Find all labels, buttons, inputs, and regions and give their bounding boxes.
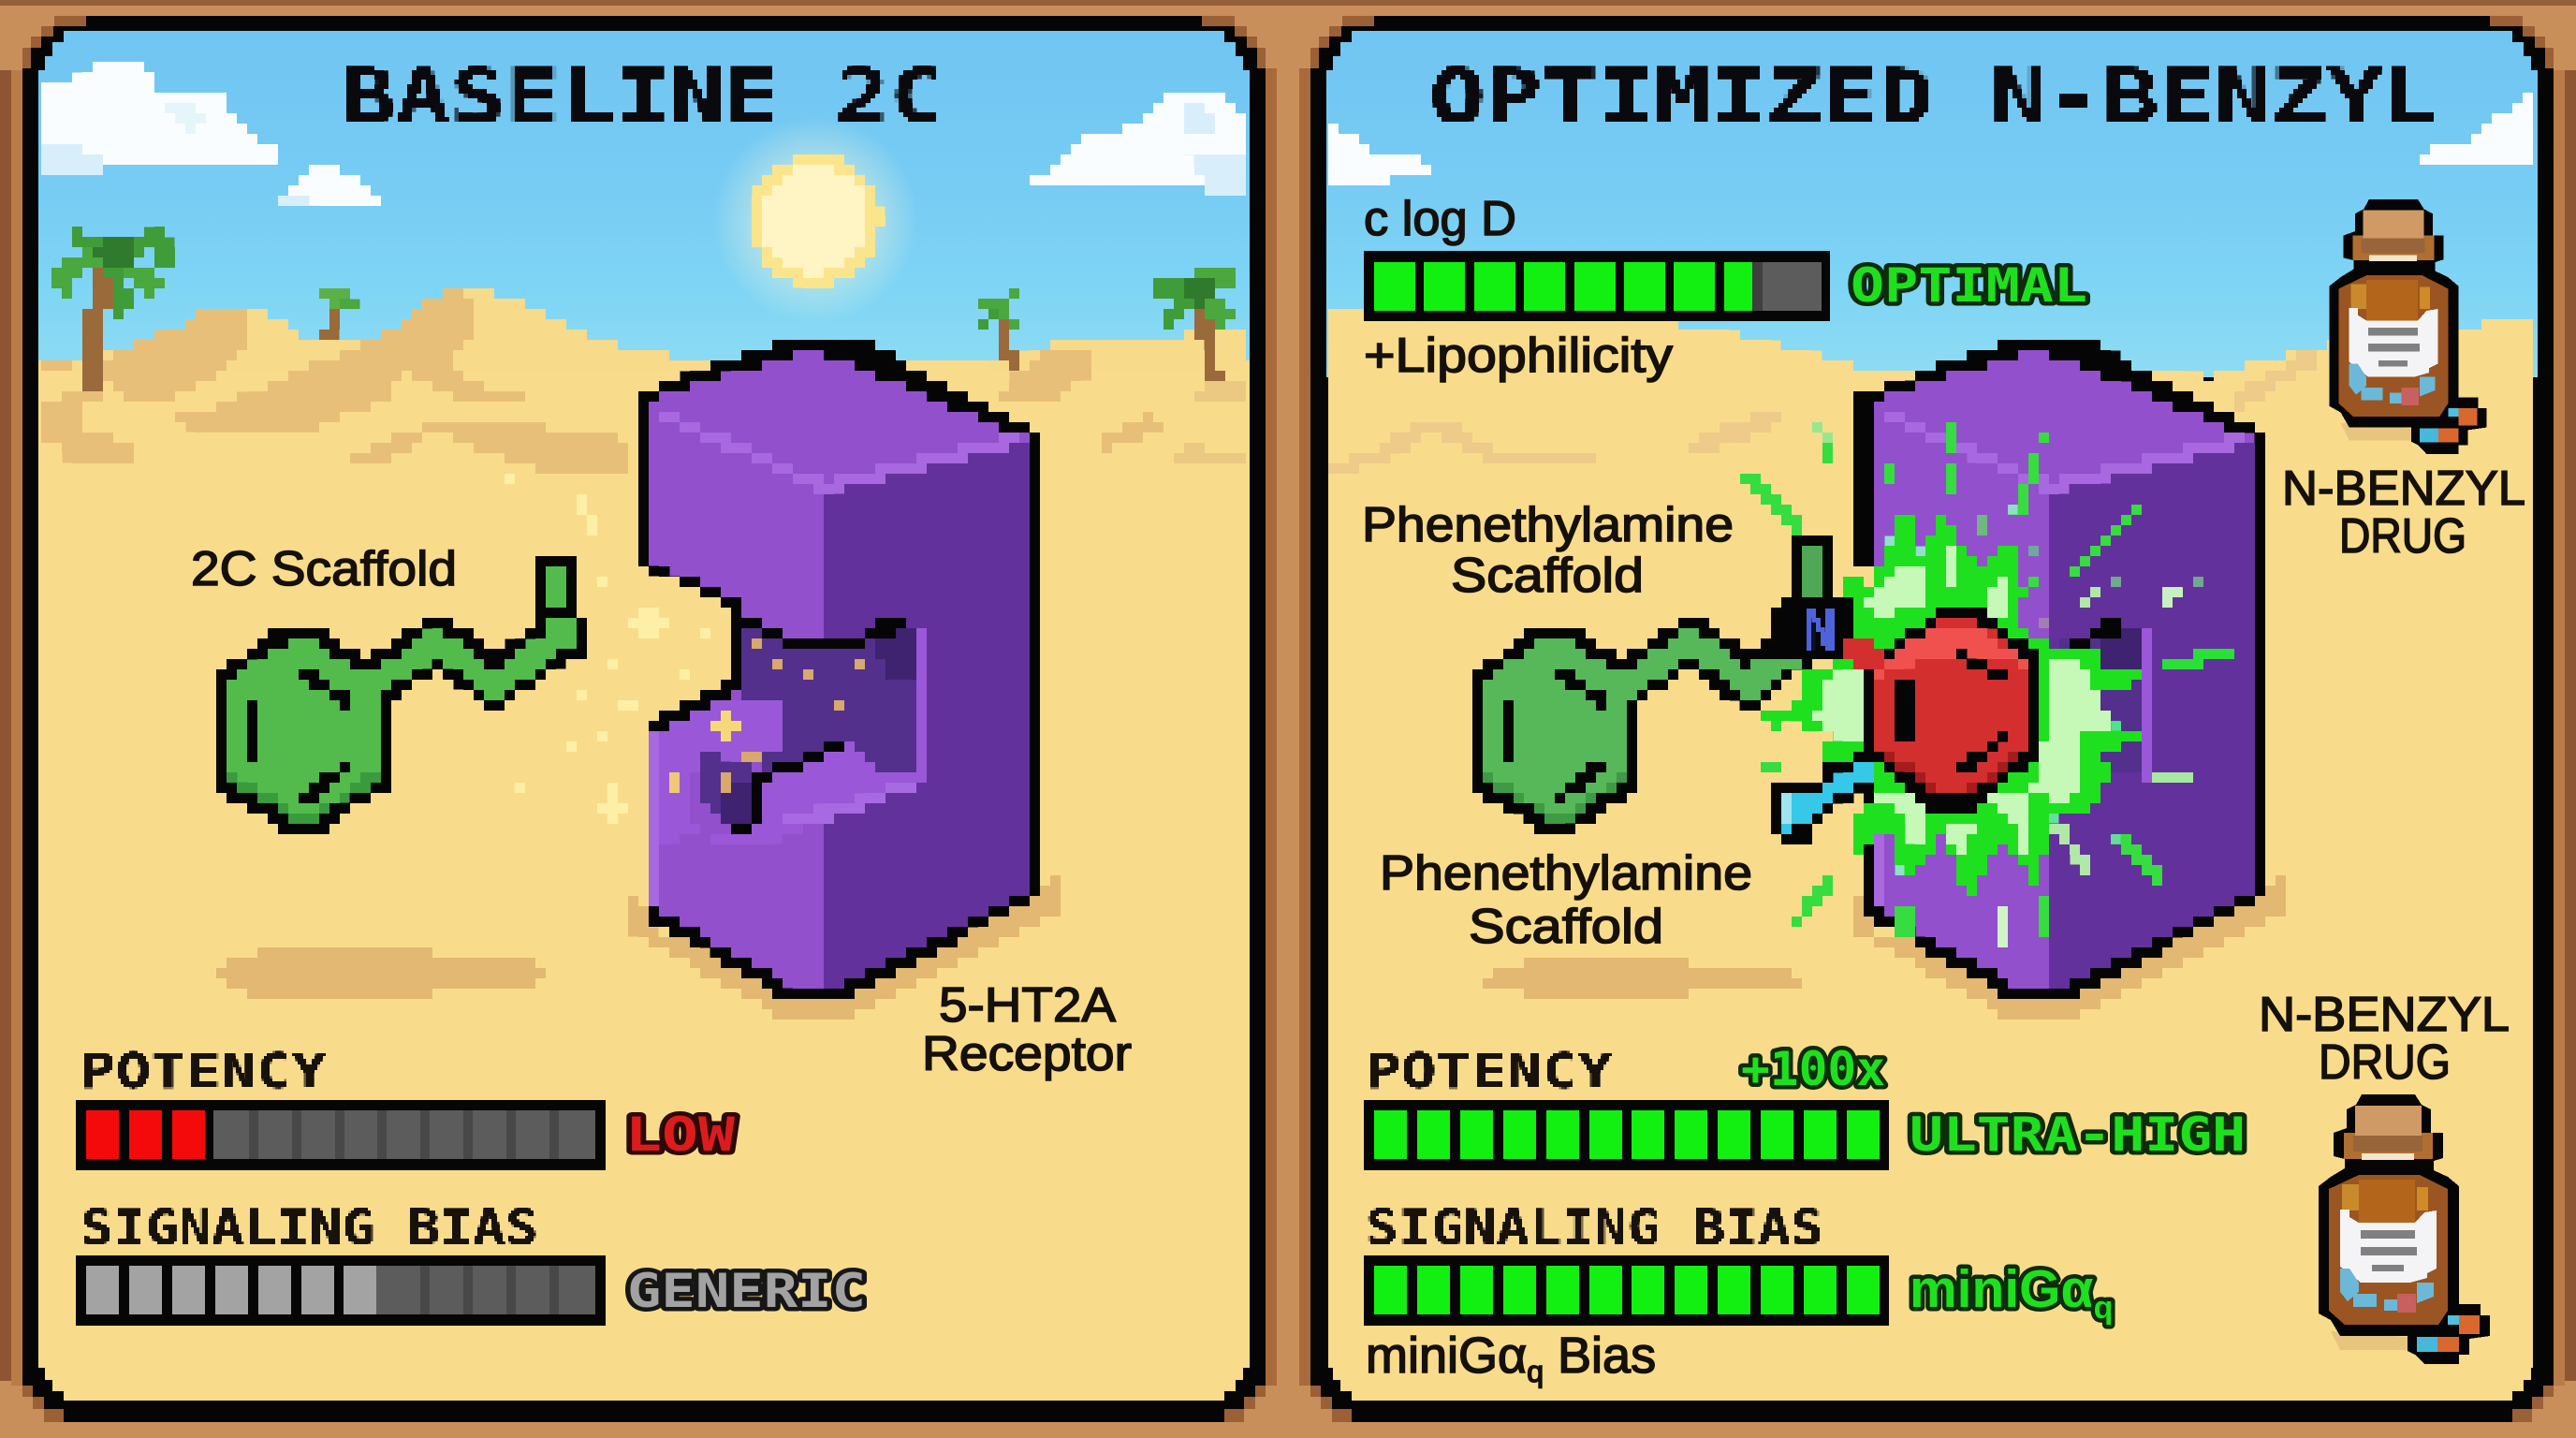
green energy rays [1744,425,2232,947]
stat: signaling bias left: GENERIC [627,1264,866,1318]
stat: potency left [76,1044,736,1170]
dunes [37,286,1251,477]
5-HT2A receptor [634,338,1042,1004]
palm trees [58,234,1232,389]
stat: signaling bias right: Bias [1544,1328,1656,1384]
sun [750,154,881,286]
particles [504,477,708,821]
label: N-benzyl drug upper: N-BENZYL [2282,462,2525,516]
label: 5-HT2A receptor [922,978,1132,1081]
title: baseline 2C: BASELINE 2C [341,53,944,140]
receptor cavity [655,609,924,847]
dunes [1326,348,2312,477]
label: phenethylamine scaffold lower: Phenethylamine [1380,846,1752,901]
specks [1975,433,2200,628]
receptor shadow [624,875,1062,1024]
stat: c log D: OPTIMAL [1851,258,2087,313]
stat: signaling bias right: q [2094,1290,2113,1326]
stat: signaling bias right: q [1527,1355,1544,1388]
panel: baseline 2C [22,16,1266,1422]
stat: potency left: LOW [625,1108,736,1162]
stat: potency right: POTENCY [1366,1044,1614,1100]
N atom label: N [1803,597,1837,663]
clouds [38,60,1251,209]
label: 5-HT2A receptor: 5-HT2A [939,978,1116,1033]
stat: signaling bias left [76,1200,866,1326]
label: N-benzyl drug lower: DRUG [2319,1035,2451,1090]
panel: optimized N-benzyl [1310,16,2554,1422]
desert background [1326,31,2539,1401]
benzyl ring [1846,606,2039,810]
label: N-benzyl drug upper [2282,462,2525,564]
stat: potency left: POTENCY [80,1044,328,1100]
desert background [37,31,1251,1401]
molecule: N stem [1760,533,1872,659]
stat: signaling bias left: SIGNALING BIAS [80,1200,538,1256]
label: phenethylamine scaffold upper [1362,498,1734,603]
stat: c log D: c log D [1364,192,1516,246]
stat: potency right: ULTRA-HIGH [1910,1108,2246,1162]
stat: c log D: +Lipophilicity [1364,329,1673,383]
cyan substituent [1772,756,1879,842]
icon: drug bottle lower [2319,1094,2490,1364]
label: 2C scaffold: 2C Scaffold [191,542,457,596]
molecule: 2C scaffold [215,552,591,831]
stat: potency right [1364,1042,2246,1170]
explosion burst [1760,512,2144,893]
label: phenethylamine scaffold upper: Scaffold [1451,549,1644,603]
label: N-benzyl drug upper: DRUG [2339,509,2466,564]
panel border [1310,16,2554,1422]
ground shadow [1481,961,1803,1004]
receptor shadow and body [1849,338,2287,1024]
sand [1326,307,2538,1401]
label: N-benzyl drug lower: N-BENZYL [2259,988,2510,1042]
label: phenethylamine scaffold lower [1380,846,1752,954]
title: optimized N-benzyl: OPTIMIZED N-BENZYL [1429,53,2439,140]
stat: potency right: +100x [1741,1042,1885,1096]
stat: c log D [1364,192,2087,383]
panel border [22,16,1266,1422]
stat: signaling bias right [1364,1200,2113,1388]
stat: signaling bias right: miniGα [1366,1328,1527,1384]
ground shadow [215,949,548,1004]
icon: drug bottle upper [2330,199,2487,454]
label: phenethylamine scaffold lower: Scaffold [1469,900,1663,954]
label: 5-HT2A receptor: Receptor [922,1027,1132,1081]
label: N-benzyl drug lower [2259,988,2510,1090]
stat: signaling bias right: SIGNALING BIAS [1366,1200,1823,1256]
molecule: phenethylamine scaffold [1470,627,1807,831]
clouds [1326,92,2537,187]
label: phenethylamine scaffold upper: Phenethylamine [1362,498,1734,552]
stat: signaling bias right: miniGα [1910,1259,2094,1319]
